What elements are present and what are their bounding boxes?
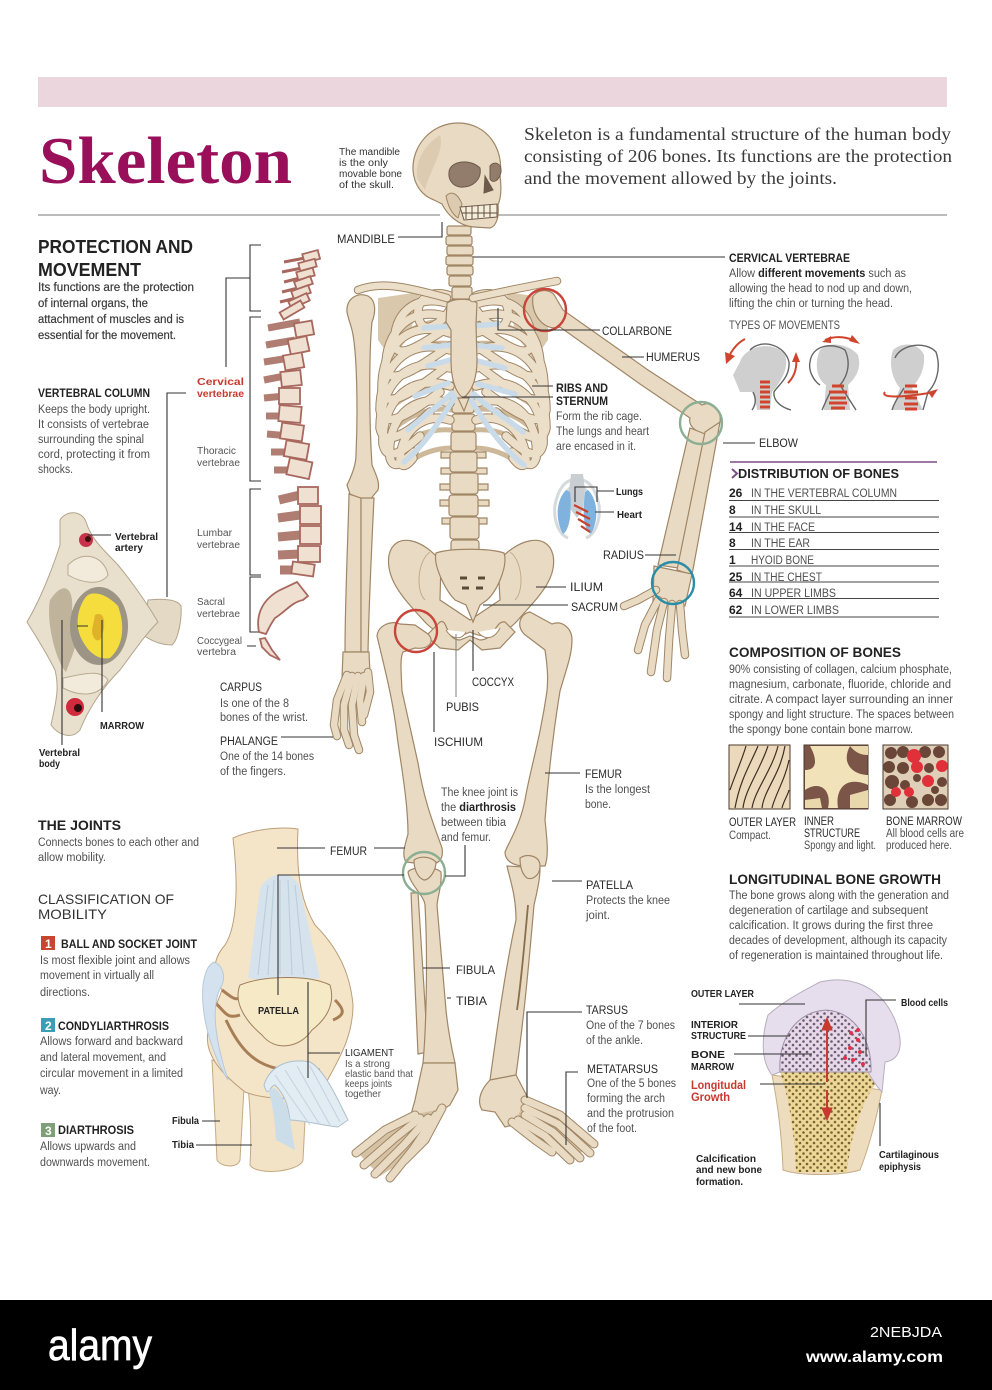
icon: chevron (732, 469, 737, 478)
intro text (524, 124, 952, 188)
clavicles (358, 281, 557, 298)
icon: lungs and heart (555, 474, 643, 538)
spine lumbar and thoracic (440, 300, 489, 562)
label: marrow: MARROW (100, 721, 145, 732)
label: fibula: FIBULA (456, 965, 495, 977)
label: cartilaginous epiphysis: Cartilaginous (879, 1150, 939, 1161)
caption: bone marrow: All blood cells are (886, 828, 964, 840)
body text: cord, protecting it from (38, 449, 150, 461)
label: interior structure (691, 1020, 746, 1042)
label: femur: Is the longest (585, 784, 651, 796)
label: lumbar vertebrae (197, 528, 240, 551)
panel: longitudinal bone growth (691, 871, 949, 1188)
caption: inner structure: Spongy and light. (804, 840, 876, 852)
body text (729, 268, 912, 310)
label: patella: PATELLA (586, 880, 633, 892)
label: elbow: ELBOW (759, 438, 798, 450)
label: radius: RADIUS (603, 550, 644, 562)
text: phalange (220, 736, 333, 778)
caption: inner structure: INNER (804, 816, 834, 828)
caption: inner structure: STRUCTURE (804, 828, 860, 840)
item 2: 2 (45, 1019, 52, 1033)
heading: DISTRIBUTION OF BONES (738, 466, 899, 481)
item 2: CONDYLIARTHROSIS (58, 1021, 169, 1033)
table rows: 14 (729, 520, 743, 534)
rib cage right (476, 294, 546, 465)
classification heading: MOBILITY (38, 906, 108, 922)
label: ligament: keeps joints (345, 1079, 392, 1090)
label: metatarsus (587, 1064, 676, 1135)
right forearm (658, 422, 720, 575)
item 3: DIARTHROSIS (58, 1125, 134, 1137)
table rows: 1 (729, 553, 736, 567)
bone growth illustration (734, 980, 900, 1174)
body text: attachment of muscles and is (38, 314, 184, 326)
text: phalange: of the fingers. (220, 766, 286, 778)
text: carpus: bones of the wrist. (220, 712, 308, 724)
intro text: and the movement allowed by the joints. (524, 168, 837, 188)
body text: the spongy bone contain bone marrow. (729, 724, 913, 736)
body text: Connects bones to each other and (38, 837, 199, 849)
label: coccygeal vertebra: vertebra (197, 647, 236, 658)
right humerus (533, 291, 720, 434)
item 1: directions. (40, 987, 90, 999)
patellar ligament (264, 1061, 348, 1127)
label: longitudinal growth: Growth (691, 1092, 730, 1104)
mandible note: is the only (339, 158, 388, 169)
scapula shading (378, 292, 548, 360)
header rule (38, 214, 947, 216)
icon: lungs and heart: Lungs (616, 487, 643, 498)
caption: bone marrow (886, 816, 964, 852)
swatch: bone marrow (883, 745, 948, 809)
body text: allowing the head to nod up and down, (729, 283, 912, 295)
item 2 (39, 1018, 183, 1097)
knee joint note: The knee joint is (441, 787, 518, 799)
arrow: growth (822, 1018, 832, 1120)
body text: surrounding the spinal (38, 434, 144, 446)
label: humerus: HUMERUS (646, 352, 700, 364)
label: thoracic vertebrae (197, 446, 240, 469)
label: thoracic vertebrae: Thoracic (197, 446, 236, 457)
item 2: and lateral movement, and (40, 1052, 166, 1064)
label: collarbone: COLLARBONE (602, 326, 672, 338)
text: phalange: PHALANGE (220, 736, 278, 748)
table rows: 25 (729, 570, 743, 584)
label: vertebral artery: Vertebral (115, 532, 158, 543)
body text: Its functions are the protection (38, 282, 194, 294)
skeleton illustration (334, 123, 722, 1178)
label: lumbar vertebrae: Lumbar (197, 528, 233, 539)
panel: distribution of bones (729, 462, 939, 617)
body text (38, 837, 199, 864)
icon: head tilt (810, 335, 860, 410)
body text: decades of development, although its capacity (729, 935, 947, 947)
label: sacrum: SACRUM (571, 602, 618, 614)
knee joint note: and femur. (441, 832, 491, 844)
label: ligament: together (345, 1089, 382, 1100)
heading: MOVEMENT (38, 260, 141, 280)
caption: outer layer (729, 817, 796, 842)
label: tarsus: of the ankle. (586, 1035, 643, 1047)
text: carpus (220, 682, 308, 724)
body text: essential for the movement. (38, 330, 176, 342)
item 1: 1 (45, 937, 52, 951)
title: Skeleton (39, 124, 292, 198)
label: ribs and sternum: The lungs and heart (556, 426, 650, 438)
skull (413, 123, 501, 228)
label: thoracic vertebrae: vertebrae (197, 458, 240, 469)
item 3: downwards movement. (40, 1157, 150, 1169)
table rows: 8 (729, 503, 736, 517)
patella (238, 978, 332, 1046)
heading: PROTECTION AND (38, 237, 193, 257)
item 2: way. (39, 1085, 61, 1097)
lateral spine with labels (197, 245, 321, 660)
label: ilium: ILIUM (570, 582, 603, 594)
body text: allow mobility. (38, 852, 106, 864)
mandible note: The mandible (339, 147, 400, 158)
watermark logo: alamy (48, 1321, 152, 1370)
fibula (212, 1060, 245, 1166)
right foot (480, 1075, 594, 1160)
body text: of regeneration is maintained throughout life. (729, 950, 943, 962)
classification heading: CLASSIFICATION OF (38, 891, 174, 907)
knee illustration (172, 828, 413, 1171)
label: ribs and sternum: are encased in it. (556, 441, 636, 453)
left humerus and forearm (345, 295, 379, 652)
types of movements heading: TYPES OF MOVEMENTS (729, 320, 840, 332)
lumbar vertebrae (278, 487, 321, 576)
label: ribs and sternum: RIBS AND (556, 383, 608, 395)
icon: head nod (725, 339, 800, 410)
knee joint note (441, 787, 518, 844)
label: fibula: Fibula (172, 1116, 199, 1127)
label: ischium: ISCHIUM (434, 737, 483, 749)
item 2: circular movement in a limited (40, 1068, 183, 1080)
body text: magnesium, carbonate, fluoride, chloride and (729, 679, 951, 691)
femur and condyles (207, 828, 353, 1098)
heading: THE JOINTS (38, 817, 121, 833)
label: sacral vertebrae (197, 597, 240, 620)
heading: LONGITUDINAL BONE GROWTH (729, 871, 941, 887)
item 3: Allows upwards and (40, 1141, 136, 1153)
caption: inner structure (804, 816, 876, 852)
label: longitudinal growth (691, 1080, 746, 1104)
body text: spongy and light structure. The spaces between (729, 709, 954, 721)
label: coccygeal vertebra: Coccygeal (197, 636, 242, 647)
body text (38, 282, 194, 342)
table rows: IN THE CHEST (751, 572, 822, 584)
lateral ligament (203, 962, 228, 1080)
label: ribs and sternum: STERNUM (556, 396, 608, 408)
label: femur: bone. (585, 799, 611, 811)
body text (38, 404, 150, 476)
tibia (245, 1060, 308, 1171)
label: metatarsus: forming the arch (587, 1093, 665, 1105)
label: calcification: and new bone (696, 1165, 762, 1176)
label: coccygeal vertebra (197, 636, 242, 658)
quadriceps tendon (248, 874, 320, 981)
label: patella: joint. (585, 910, 610, 922)
label: blood cells: Blood cells (901, 998, 948, 1009)
text: phalange: One of the 14 bones (220, 751, 314, 763)
label: vertebral artery (115, 532, 158, 554)
heading (38, 237, 193, 280)
cervical vertebrae (280, 250, 320, 319)
label: bone marrow (691, 1050, 735, 1073)
item 1: Is most flexible joint and allows (40, 955, 190, 967)
item 1: BALL AND SOCKET JOINT (61, 939, 197, 951)
label: cartilaginous epiphysis (879, 1150, 939, 1173)
caption: bone marrow: BONE MARROW (886, 816, 962, 828)
label: cervical vertebrae: vertebrae (197, 388, 244, 400)
item 3 (40, 1123, 150, 1169)
sternum (446, 299, 477, 398)
label: sacral vertebrae: Sacral (197, 597, 225, 608)
label: ribs and sternum: Form the rib cage. (556, 411, 642, 423)
label: bone marrow: BONE (691, 1050, 725, 1061)
table rows: HYOID BONE (751, 555, 814, 567)
table rows: 8 (729, 536, 736, 550)
label: interior structure: STRUCTURE (691, 1031, 746, 1042)
label: pubis: PUBIS (446, 702, 479, 714)
table rows: IN THE VERTEBRAL COLUMN (751, 488, 897, 500)
body text: lifting the chin or turning the head. (729, 298, 893, 310)
mandible note (339, 147, 402, 191)
label: ligament: LIGAMENT (345, 1047, 395, 1059)
label: metatarsus: of the foot. (587, 1123, 637, 1135)
label: vertebral body (39, 748, 80, 770)
label: calcification: formation. (696, 1177, 743, 1188)
item 2: Allows forward and backward (40, 1036, 183, 1048)
label: bone marrow: MARROW (691, 1062, 735, 1073)
label: metatarsus: One of the 5 bones (587, 1078, 676, 1090)
table rows: 26 (729, 486, 743, 500)
label: longitudinal growth: Longitudal (691, 1080, 746, 1092)
label: tibia: Tibia (172, 1140, 194, 1151)
panel: vertebral column (38, 388, 186, 597)
label: patella: Protects the knee (586, 895, 670, 907)
intro text: Skeleton is a fundamental structure of the human body (524, 124, 951, 144)
body text: calcification. It grows during the first three (729, 920, 933, 932)
label: patella (585, 880, 670, 922)
label: metatarsus: METATARSUS (587, 1064, 658, 1076)
item 3: 3 (45, 1124, 52, 1138)
label: outer layer: OUTER LAYER (691, 989, 755, 1000)
label: femur (585, 769, 651, 811)
label: ligament: Is a strong (345, 1059, 390, 1070)
highlight circles (395, 289, 722, 894)
body text: citrate. A compact layer surrounding an inner (729, 694, 953, 706)
panel: protection and movement (38, 237, 194, 342)
center labels and leader lines (337, 222, 798, 1145)
label: femur: FEMUR (330, 846, 367, 858)
sacrum (258, 582, 308, 634)
label: ligament (345, 1047, 413, 1100)
caption: outer layer: Compact. (729, 830, 771, 842)
body text (729, 890, 949, 962)
table rows: IN THE EAR (751, 538, 810, 550)
heading: COMPOSITION OF BONES (729, 644, 901, 660)
costal cartilage (404, 324, 524, 465)
panel: the joints (38, 817, 199, 1169)
panel: cervical vertebrae (725, 253, 938, 410)
body text (729, 664, 954, 736)
table rows: 64 (729, 586, 743, 600)
intro text: consisting of 206 bones. Its functions are the protection (524, 146, 952, 166)
mandible note: of the skull. (339, 180, 394, 191)
heading: VERTEBRAL COLUMN (38, 388, 150, 400)
image id: 2NEBJDA (870, 1324, 942, 1341)
label: calcification (696, 1154, 762, 1188)
label: mandible: MANDIBLE (337, 234, 395, 246)
footer bar (0, 1300, 992, 1390)
label: lumbar vertebrae: vertebrae (197, 540, 240, 551)
icon: head turn (884, 345, 938, 410)
table rows: IN THE FACE (751, 522, 815, 534)
body text: of internal organs, the (38, 298, 148, 310)
thoracic vertebrae (264, 321, 314, 479)
pelvis (388, 540, 554, 650)
knee joint note: the diarthrosis (441, 802, 516, 814)
label: ribs and sternum (556, 383, 650, 453)
label: patella: PATELLA (258, 1006, 299, 1017)
left leg (377, 623, 455, 1063)
body text: Allow different movements such as (729, 268, 906, 280)
body text: Keeps the body upright. (38, 404, 150, 416)
left hand (334, 652, 370, 750)
label: tarsus: TARSUS (586, 1005, 628, 1017)
right leg (490, 612, 572, 1080)
item 1 (40, 936, 197, 999)
left foot (356, 1063, 458, 1178)
panel: composition of bones (729, 644, 964, 852)
knee joint note: between tibia (441, 817, 507, 829)
body text: It consists of vertebrae (38, 419, 149, 431)
table rows (729, 486, 939, 617)
coccyx (260, 638, 280, 660)
icon: lungs and heart: Heart (617, 510, 643, 521)
table rows: 62 (729, 603, 743, 617)
swatch: inner structure (804, 745, 868, 809)
table rows: IN UPPER LIMBS (751, 588, 836, 600)
label: ligament: elastic band that (345, 1069, 413, 1080)
label: tibia: TIBIA (456, 996, 487, 1008)
classification heading (38, 891, 174, 922)
label: coccyx: COCCYX (472, 677, 514, 689)
caption: outer layer: OUTER LAYER (729, 817, 796, 829)
label: interior structure: INTERIOR (691, 1020, 739, 1031)
text: carpus: CARPUS (220, 682, 262, 694)
label: vertebral body: body (39, 759, 60, 770)
table rows: IN THE SKULL (751, 505, 822, 517)
label: tarsus: One of the 7 bones (586, 1020, 675, 1032)
back ribs (386, 321, 540, 462)
header band (38, 77, 947, 107)
label: sacral vertebrae: vertebrae (197, 609, 240, 620)
vertebra cross-section (27, 513, 181, 770)
body text: shocks. (38, 464, 73, 476)
swatch: outer layer (729, 745, 790, 809)
body text: The bone grows along with the generation and (729, 890, 949, 902)
label: vertebral body: Vertebral (39, 748, 80, 759)
right hand (624, 566, 692, 678)
body text: 90% consisting of collagen, calcium phosphate, (729, 664, 952, 676)
rib cage left (380, 294, 450, 465)
table rows: IN LOWER LIMBS (751, 605, 839, 617)
site url: www.alamy.com (805, 1349, 943, 1366)
mandible note: movable bone (339, 169, 402, 180)
body text: degeneration of cartilage and subsequent (729, 905, 929, 917)
label: cervical vertebrae (197, 376, 244, 400)
label: cervical vertebrae: Cervical (197, 376, 244, 388)
heading: CERVICAL VERTEBRAE (729, 253, 850, 265)
label: femur: FEMUR (585, 769, 622, 781)
item 1: movement in virtually all (40, 970, 154, 982)
label: tarsus (586, 1005, 675, 1047)
label: vertebral artery: artery (115, 543, 143, 554)
caption: bone marrow: produced here. (886, 840, 952, 852)
label: cartilaginous epiphysis: epiphysis (879, 1162, 921, 1173)
label: calcification: Calcification (696, 1154, 756, 1165)
neck vertebrae (446, 226, 473, 299)
label: metatarsus: and the protrusion (587, 1108, 674, 1120)
text: carpus: Is one of the 8 (220, 698, 289, 710)
